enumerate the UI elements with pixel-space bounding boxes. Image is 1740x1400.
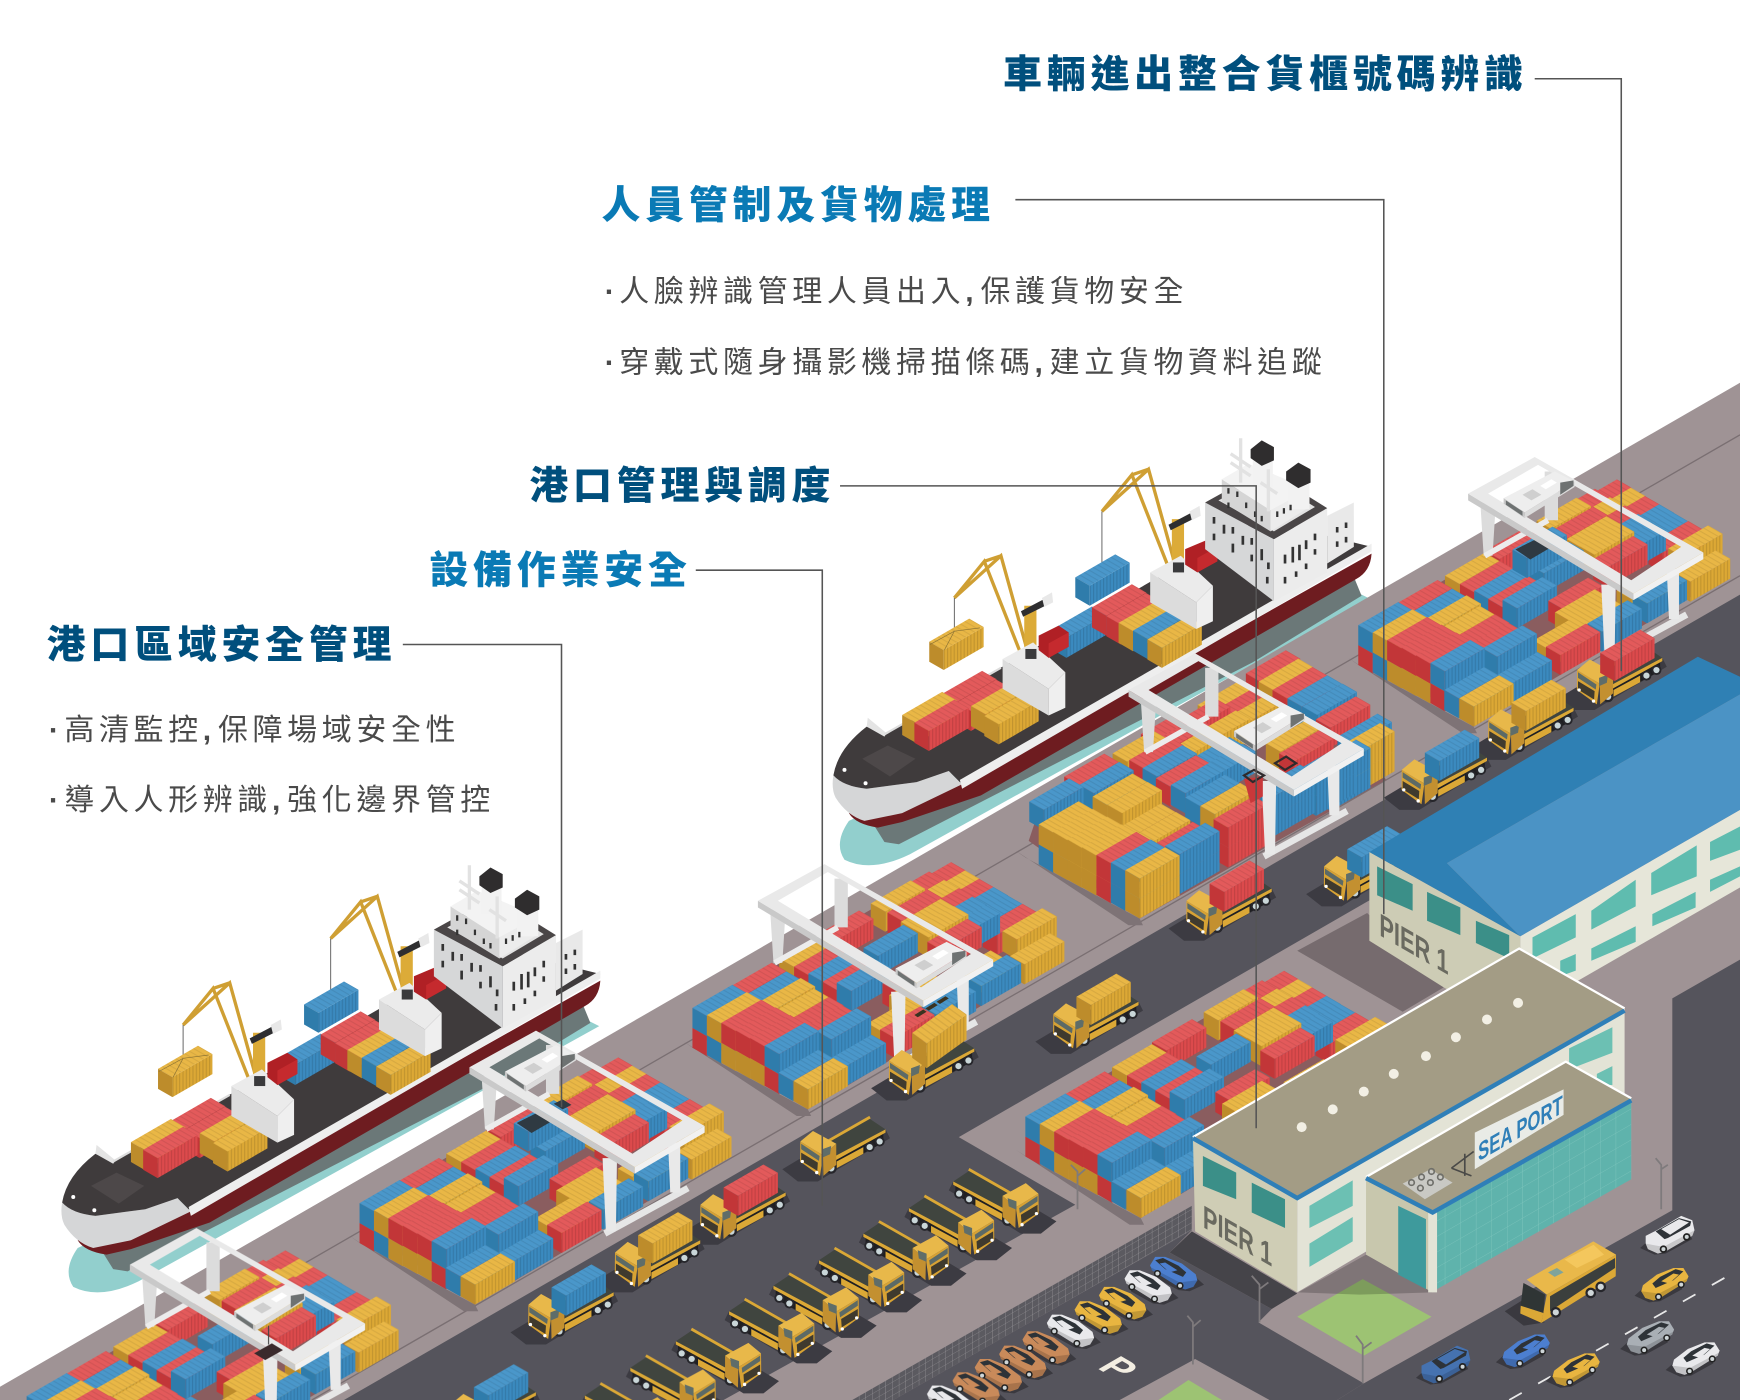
bullet list: port area safety bbox=[49, 714, 495, 817]
leader line: port management bbox=[840, 486, 1256, 1128]
warehouse shadow area bbox=[1297, 913, 1444, 1012]
heading: personnel and cargo: 人員管制及貨物處理 bbox=[601, 185, 995, 228]
bullet list: port area safety: · bbox=[49, 784, 63, 817]
blue roof warehouse: PIER 1 bbox=[1379, 906, 1449, 982]
truck loaded below gantry bbox=[871, 996, 979, 1100]
truck with red container bbox=[682, 1164, 790, 1245]
bullet list: port area safety: 導入人形辨識,強化邊界管控 bbox=[64, 784, 495, 817]
right side street bbox=[1337, 960, 1740, 1400]
container yard next to ship 1 bbox=[350, 1057, 732, 1311]
heading: vehicle access: 車輛進出整合貨櫃號碼辨識 bbox=[1003, 54, 1528, 97]
parked cars bbox=[975, 1257, 1204, 1393]
container yard behind office bbox=[1015, 971, 1397, 1225]
water under ship 1 bbox=[69, 1015, 599, 1292]
gantry crane 1 bbox=[469, 1031, 705, 1234]
small green lawn bbox=[1159, 1380, 1222, 1400]
sea port office building: SEA PORT bbox=[1478, 1091, 1563, 1167]
dock edge highlight bbox=[243, 1104, 483, 1242]
water under ship 2 bbox=[840, 588, 1370, 865]
parking P marking: P bbox=[1089, 1351, 1148, 1384]
bullet list: personnel and cargo: 穿戴式隨身攝影機掃描條碼,建立貨物資料追蹤 bbox=[619, 347, 1326, 380]
container yard centre right bbox=[1014, 650, 1395, 925]
blue roof warehouse bbox=[1369, 657, 1740, 1032]
small plaza island bbox=[1120, 1359, 1269, 1400]
heading: port management: 港口管理與調度 bbox=[529, 465, 835, 508]
sea port office building bbox=[1193, 948, 1631, 1292]
truck beside warehouse bbox=[1306, 826, 1414, 906]
heading: port area safety: 港口區域安全管理 bbox=[47, 624, 396, 667]
gantry crane 3 bbox=[758, 864, 993, 1067]
building shadow on plaza bbox=[1298, 1255, 1433, 1295]
security fence bbox=[852, 1206, 1192, 1400]
bullet list: personnel and cargo: · bbox=[605, 276, 619, 309]
dock rail lines bbox=[68, 435, 1740, 1400]
tour bus bbox=[1505, 1241, 1616, 1326]
leader line: port area safety bbox=[403, 645, 562, 1107]
street lamps bbox=[1071, 1158, 1668, 1383]
gantry crane 2 bbox=[111, 1209, 377, 1400]
truck with yellow container bbox=[597, 1212, 705, 1292]
parked trucks at bottom edge bbox=[571, 1320, 738, 1400]
leader line: equipment safety bbox=[696, 570, 822, 1206]
sea port office building: PIER 1 bbox=[1203, 1198, 1272, 1274]
parked cars at bottom edge bbox=[915, 1359, 1015, 1400]
truck with red container far right bbox=[1559, 630, 1667, 710]
truck at bottom edge bbox=[427, 1359, 544, 1400]
empty flatbed truck bbox=[782, 1117, 890, 1181]
truck with yellow container bbox=[1035, 974, 1143, 1054]
main road bbox=[344, 595, 1740, 1400]
bullet list: port area safety: 高清監控,保障場域安全性 bbox=[64, 714, 460, 747]
street lane dashes bbox=[1509, 1269, 1740, 1400]
truck with blue container bbox=[510, 1264, 618, 1345]
cargo ship 2 bbox=[833, 438, 1372, 844]
container yard bottom left bbox=[0, 1231, 466, 1400]
bullet list: port area safety: · bbox=[49, 714, 63, 747]
truck with red container bbox=[1169, 861, 1276, 941]
truck with yellow container far right bbox=[1470, 680, 1578, 760]
parking building shadow bbox=[1170, 1231, 1297, 1309]
street cars bbox=[1416, 1216, 1720, 1388]
truck with blue container far right bbox=[1384, 730, 1491, 810]
container yard centre bbox=[682, 862, 1064, 1116]
bullet list: personnel and cargo bbox=[605, 276, 1326, 380]
bullet list: personnel and cargo: 人臉辨識管理人員出入,保護貨物安全 bbox=[619, 276, 1188, 309]
container yard far right bbox=[1348, 479, 1730, 733]
heading: equipment safety: 設備作業安全 bbox=[429, 550, 692, 593]
leader line: personnel control bbox=[1015, 200, 1384, 914]
large green lawn bbox=[1297, 1279, 1432, 1356]
leader line: vehicle access bbox=[1535, 79, 1621, 671]
bullet list: personnel and cargo: · bbox=[605, 347, 619, 380]
parked trucks row bbox=[671, 1169, 1056, 1393]
gantry crane 4 bbox=[1129, 653, 1364, 856]
cargo ship 1 bbox=[61, 865, 600, 1271]
parking lot bbox=[893, 1230, 1364, 1400]
gantry crane 5 bbox=[1468, 457, 1703, 660]
dock pavement bbox=[0, 383, 1740, 1400]
